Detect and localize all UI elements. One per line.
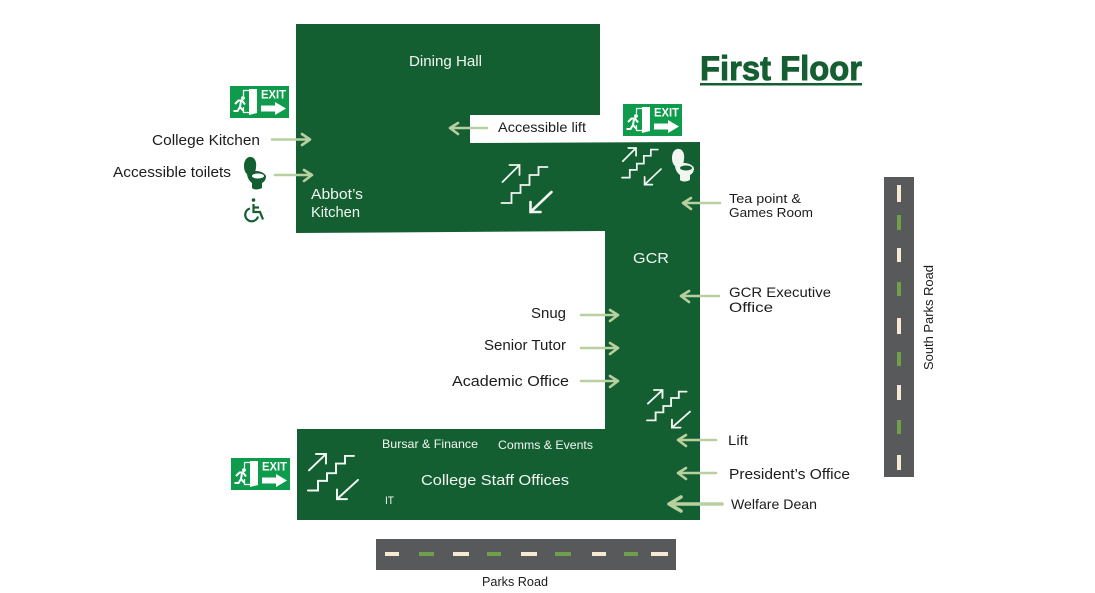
arrow: snug <box>581 310 618 321</box>
outside labels: Tea point & <box>729 191 801 206</box>
room labels inside the building <box>311 54 669 507</box>
room labels inside the building: Dining Hall <box>409 54 482 70</box>
icon: exit sign top right: EXIT <box>654 106 680 120</box>
room labels inside the building: Bursar & Finance <box>382 437 478 451</box>
icon: toilet dark green <box>244 157 266 190</box>
icon: exit sign lower left <box>231 458 290 490</box>
outside labels: President’s Office <box>729 467 850 483</box>
arrow: president's office <box>678 468 716 479</box>
outside labels: Senior Tutor <box>484 338 566 354</box>
icon: stairs centre <box>502 165 552 212</box>
outside labels: Snug <box>531 306 566 322</box>
room labels inside the building: GCR <box>633 251 669 267</box>
arrow: tea point <box>683 198 720 209</box>
icon: exit sign top right <box>623 104 682 136</box>
arrow: academic office <box>581 376 618 387</box>
title: First Floor <box>700 50 862 88</box>
icon: exit sign lower left: EXIT <box>262 460 288 474</box>
icon: stairs top right <box>622 148 661 185</box>
arrow: accessible toilets <box>275 170 312 181</box>
outside labels: Academic Office <box>452 374 569 390</box>
outside labels: College Kitchen <box>152 133 260 149</box>
outside labels: Office <box>729 299 773 315</box>
arrow: college kitchen <box>272 134 310 145</box>
icon: toilet white <box>672 149 694 182</box>
room labels inside the building: Comms & Events <box>498 438 593 452</box>
outside labels: Accessible toilets <box>113 165 231 181</box>
arrow: lift <box>678 435 716 446</box>
room labels inside the building: Kitchen <box>311 205 360 221</box>
arrow: welfare dean <box>669 497 722 511</box>
outside labels <box>113 119 850 512</box>
road label: Parks Road: Parks Road <box>482 575 548 589</box>
icon: stairs staff offices <box>308 454 358 499</box>
outside labels: Accessible lift <box>498 119 586 135</box>
road label: South Parks Road: South Parks Road <box>922 265 936 370</box>
icon: exit sign left upper <box>230 86 289 118</box>
outside labels: Games Room <box>729 205 813 220</box>
arrow: senior tutor <box>581 343 618 354</box>
room labels inside the building: College Staff Offices <box>421 473 569 489</box>
icon: stairs lower right <box>647 390 690 428</box>
outside labels: Lift <box>728 432 748 448</box>
icon: wheelchair <box>245 198 263 221</box>
road: Parks Road <box>376 539 676 570</box>
outside labels: GCR Executive <box>729 284 831 300</box>
outside labels: Welfare Dean <box>731 496 817 512</box>
icon: exit sign left upper: EXIT <box>261 88 287 102</box>
floor plan building shape <box>296 24 700 520</box>
arrow: accessible lift <box>450 123 487 134</box>
arrow: GCR executive office <box>681 291 719 302</box>
room labels inside the building: Abbot’s <box>311 187 363 203</box>
road: South Parks Road <box>884 177 914 477</box>
room labels inside the building: IT <box>385 495 394 507</box>
